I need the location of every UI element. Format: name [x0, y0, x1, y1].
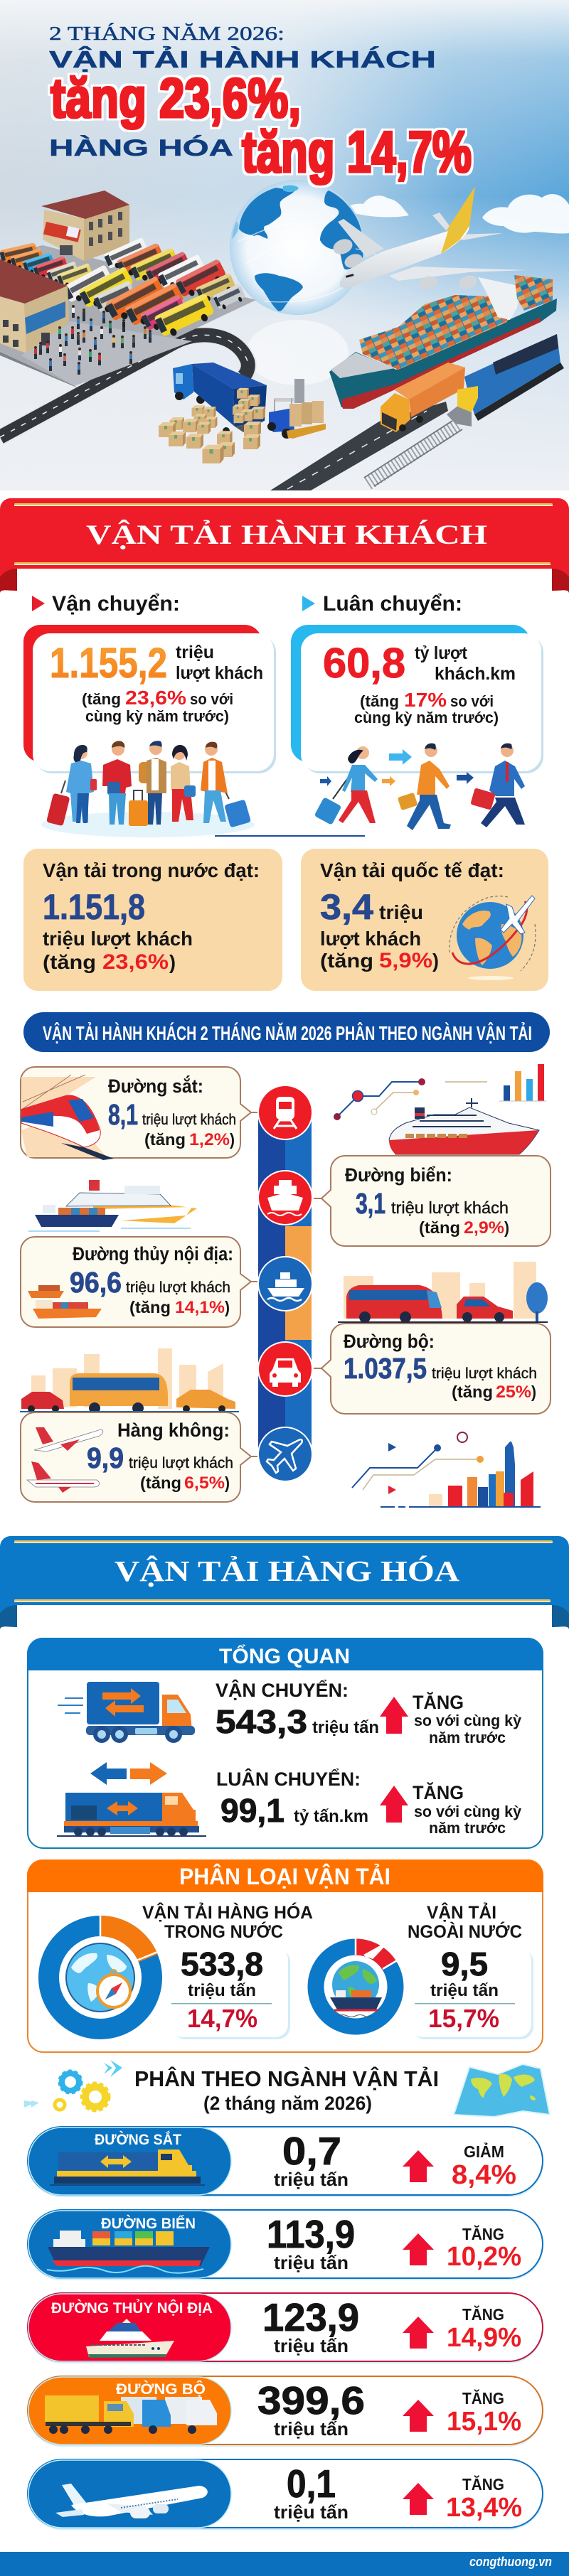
panel: overview: TĂNG [413, 1691, 464, 1713]
panel: overview: TĂNG [413, 1781, 464, 1803]
card: sea passenger: 3,1 [356, 1187, 385, 1220]
row: rail freight: GIẢM [464, 2141, 504, 2161]
panel: domestic transport: 23,6% [102, 950, 169, 974]
icon: clouds [345, 194, 569, 234]
row: road freight [27, 2376, 543, 2447]
row: road freight: 15,1% [447, 2407, 521, 2437]
icon: locomotive with arrows [57, 1762, 206, 1836]
panel: passenger volume card: (tăng [82, 690, 121, 708]
illustration: cruise and cargo ships left [28, 1180, 197, 1231]
row: sea freight: triệu tấn [274, 2252, 349, 2273]
card: domestic stats: 14,7% [187, 2004, 257, 2033]
hero title: tăng 23,6%, [50, 66, 301, 129]
panel: classification: TRONG NƯỚC [164, 1921, 283, 1942]
panel: passenger volume card: cùng kỳ năm trước) [85, 707, 229, 725]
icon: world map [454, 2064, 550, 2117]
panel: passenger-km card: tỷ lượt [415, 643, 468, 663]
card: air passenger: triệu lượt khách [129, 1455, 233, 1471]
panel: passenger section banner: VẬN TẢI HÀNH KHÁCH [86, 519, 487, 550]
row: sea freight: 113,9 [267, 2212, 355, 2256]
train: blue locomotive [447, 334, 564, 426]
card: rail passenger: 1,2% [189, 1130, 230, 1149]
card: road passenger: (tăng [452, 1383, 493, 1401]
footer: congthuong.vn [469, 2555, 552, 2569]
heading: by transport mode: PHÂN THEO NGÀNH VẬN TẢI [134, 2066, 439, 2091]
card: rail passenger [21, 1067, 257, 1160]
card: road passenger: 25% [496, 1383, 531, 1402]
panel: overview: 543,3 [216, 1703, 307, 1740]
panel: cargo section banner: VẬN TẢI HÀNG HÓA [115, 1555, 459, 1587]
icon: three trucks [45, 2395, 217, 2434]
heading: van chuyen: Vận chuyển: [52, 592, 180, 616]
panel: hero header [0, 0, 569, 490]
panel: overview: so với cùng kỳ [414, 1803, 522, 1820]
truck: orange [381, 363, 465, 432]
panel: passenger-km card: cùng kỳ năm trước) [354, 709, 499, 726]
illustration: group of travellers [41, 741, 255, 837]
panel: international transport: Vận tải quốc tế đạt: [320, 859, 504, 881]
card: inland waterway passenger: ) [225, 1298, 230, 1316]
row: rail freight: ĐƯỜNG SẮT [95, 2131, 181, 2148]
panel: classification [27, 1859, 543, 2052]
icon: airplane [55, 2484, 208, 2518]
row: inland waterway freight: 123,9 [262, 2295, 359, 2339]
card: sea passenger [314, 1156, 551, 1246]
hero title: VẬN TẢI HÀNH KHÁCH [49, 46, 436, 73]
panel: overview: năm trước [429, 1819, 506, 1837]
panel: domestic transport: Vận tải trong nước đạt: [43, 859, 260, 881]
card: rail passenger: triệu lượt khách [142, 1112, 236, 1128]
row: inland waterway freight [27, 2293, 543, 2363]
card: international stats: triệu tấn [430, 1981, 499, 2000]
row: air freight: triệu tấn [274, 2501, 349, 2523]
building: bus station front [0, 259, 69, 353]
icon: air circle [257, 1427, 313, 1482]
panel: overview [27, 1638, 543, 1848]
illustration: high speed train [21, 1075, 114, 1160]
panel: passenger-km card: so với [450, 692, 494, 710]
panel: domestic transport: ) [169, 951, 176, 973]
row: road freight: 399,6 [257, 2378, 365, 2422]
panel: passenger volume card: 23,6% [125, 687, 186, 709]
illustration: walking travellers with arrows [314, 744, 525, 830]
card: inland waterway passenger: (tăng [129, 1298, 171, 1316]
hero title: tăng 14,7% [242, 119, 472, 185]
panel: overview: triệu tấn [312, 1718, 379, 1737]
panel: overview: so với cùng kỳ [414, 1712, 522, 1729]
card: inland waterway passenger: triệu lượt khách [126, 1279, 230, 1296]
card: air passenger: 9,9 [87, 1442, 124, 1474]
panel: domestic transport: triệu lượt khách [43, 928, 193, 950]
row: rail freight: 0,7 [282, 2129, 341, 2173]
card: inland waterway passenger: Đường thủy nội địa: [73, 1243, 233, 1265]
panel: overview: TỔNG QUAN [219, 1644, 350, 1668]
card: inland waterway passenger [21, 1237, 257, 1327]
road and rail right [270, 402, 462, 490]
panel: overview: tỷ tấn.km [294, 1807, 368, 1826]
row: air freight [27, 2459, 543, 2530]
heading: by transport mode: (2 tháng năm 2026) [203, 2093, 372, 2114]
card: air passenger: ) [225, 1474, 230, 1492]
icon: globe with plane [450, 896, 536, 980]
row: sea freight: TĂNG [462, 2224, 504, 2243]
icon: yellow locomotive [50, 2150, 205, 2185]
panel: classification: NGOÀI NƯỚC [408, 1921, 522, 1942]
panel: passenger volume card: lượt khách [176, 663, 263, 683]
row: sea freight: ĐƯỜNG BIỂN [101, 2215, 196, 2232]
card: domestic stats: 533,8 [181, 1946, 263, 1982]
icon: small boats [28, 1285, 102, 1319]
card: international stats: 9,5 [441, 1946, 488, 1982]
panel: passenger volume card: 1.155,2 [50, 640, 167, 687]
card: domestic stats: triệu tấn [188, 1981, 256, 2000]
buses: parking [0, 237, 247, 340]
building: bus station back [41, 190, 129, 261]
panel: passenger volume card: triệu [176, 643, 214, 662]
parking ground [0, 245, 256, 386]
row: air freight: TĂNG [462, 2474, 504, 2494]
center timeline column [257, 1085, 313, 1482]
icon: rail circle [257, 1085, 313, 1140]
boxes [159, 388, 265, 463]
card: international stats: 15,7% [428, 2004, 499, 2033]
panel: classification: VẬN TẢI [427, 1901, 496, 1923]
panel: passenger-km card: (tăng [360, 692, 399, 710]
card: road passenger: triệu lượt khách [432, 1365, 537, 1382]
row: inland waterway freight: triệu tấn [274, 2335, 349, 2356]
forklift [267, 379, 326, 439]
arrow: up [403, 2150, 434, 2182]
hero title: 2 THÁNG NĂM 2026: [49, 23, 284, 44]
row: inland waterway freight: TĂNG [462, 2304, 504, 2324]
panel: passenger-km card: 17% [404, 689, 447, 711]
panel: passenger volume card [23, 625, 276, 773]
icon: globe [230, 180, 391, 385]
card: air passenger: Hàng không: [117, 1420, 230, 1441]
title bar: passenger by mode [23, 1012, 550, 1052]
ship: container vessel [329, 275, 557, 409]
illustration: cruise ship right [389, 1098, 539, 1154]
card: road passenger: ) [531, 1383, 536, 1401]
icon: road circle [257, 1341, 313, 1397]
card: rail passenger: Đường sắt: [108, 1075, 203, 1097]
panel: passenger-km card: 60,8 [323, 640, 405, 687]
heading: luan chuyen: Luân chuyển: [323, 592, 462, 616]
card: sea passenger: 2,9% [464, 1218, 504, 1238]
card: inland waterway passenger: 14,1% [175, 1298, 225, 1317]
card: road passenger [314, 1324, 551, 1414]
chart: domestic donut [48, 1915, 159, 2029]
illustration: red bus and van [338, 1262, 548, 1323]
row: rail freight: 8,4% [452, 2160, 516, 2190]
panel: overview: 99,1 [220, 1792, 284, 1829]
card: rail passenger: 8,1 [108, 1098, 138, 1131]
arrow: up [403, 2400, 434, 2432]
icon: planes [27, 1427, 103, 1493]
card: domestic stats [171, 1946, 290, 2039]
panel: classification: PHÂN LOẠI VẬN TẢI [179, 1864, 390, 1889]
row: rail freight: triệu tấn [274, 2169, 349, 2190]
row: road freight: ĐƯỜNG BỘ [116, 2381, 206, 2398]
panel: domestic transport: (tăng [43, 951, 96, 973]
arrow: up [380, 1697, 408, 1734]
hero title: HÀNG HÓA [49, 135, 233, 161]
icon: cargo ship [47, 2231, 210, 2273]
panel: passenger-km card [291, 625, 543, 773]
panel: overview: VẬN CHUYỂN: [216, 1679, 349, 1701]
icon: delivery truck [58, 1682, 195, 1743]
panel: international transport: triệu [379, 901, 423, 923]
arrow: up [403, 2317, 434, 2349]
panel: passenger volume card: so với [190, 690, 233, 708]
panel: passenger section banner [0, 498, 569, 594]
panel: international transport: 5,9% [379, 949, 432, 972]
panel: passenger-km card: khách.km [435, 664, 516, 684]
card: sea passenger: Đường biển: [345, 1164, 452, 1186]
row: inland waterway freight: 14,9% [447, 2323, 521, 2353]
card: air passenger: (tăng [140, 1474, 181, 1492]
plane: airliner [331, 186, 526, 292]
row: sea freight: 10,2% [447, 2242, 521, 2272]
row: inland waterway freight: ĐƯỜNG THỦY NỘI ĐỊA [51, 2299, 213, 2317]
panel: international transport: lượt khách [320, 928, 421, 950]
decoration: gears and chevron [24, 2060, 122, 2111]
panel: domestic transport [23, 849, 282, 991]
panel: cargo section banner [0, 1536, 569, 1630]
panel: overview: năm trước [429, 1729, 506, 1746]
icon: waterway circle [257, 1256, 313, 1311]
truck: blue container [173, 363, 267, 434]
arrow: up [403, 2233, 434, 2265]
heading: by transport mode [134, 2066, 439, 2114]
panel: international transport: ) [432, 950, 439, 972]
card: sea passenger: triệu lượt khách [391, 1198, 509, 1217]
card: road passenger: Đường bộ: [344, 1331, 435, 1352]
row: road freight: triệu tấn [274, 2418, 349, 2440]
arrow: up [403, 2483, 434, 2515]
row: rail freight [27, 2127, 543, 2197]
decoration: city bars bottom right [352, 1432, 541, 1507]
panel: domestic transport: 1.151,8 [43, 887, 145, 927]
card: rail passenger: (tăng [144, 1130, 186, 1149]
hero title [49, 23, 472, 185]
card: road passenger: 1.037,5 [344, 1352, 427, 1385]
row: air freight: 0,1 [287, 2462, 336, 2506]
card: inland waterway passenger: 96,6 [70, 1266, 122, 1299]
row: air freight: 13,4% [446, 2493, 522, 2523]
icon: passenger ferry [86, 2319, 174, 2358]
road curve [0, 335, 248, 437]
row: road freight: TĂNG [462, 2388, 504, 2408]
arrow: up [380, 1786, 408, 1823]
people crowd [34, 305, 151, 375]
icon: sea circle [257, 1170, 313, 1225]
card: rail passenger: ) [230, 1130, 235, 1149]
panel: international transport: 3,4 [320, 887, 373, 927]
card: sea passenger: ) [504, 1218, 509, 1237]
panel: international transport [301, 849, 548, 991]
row: sea freight [27, 2210, 543, 2280]
panel: overview: LUÂN CHUYỂN: [216, 1768, 361, 1790]
card: sea passenger: (tăng [419, 1218, 460, 1237]
panel: international transport: (tăng [320, 950, 373, 972]
card: international stats [410, 1946, 533, 2039]
chart: international donut [316, 1938, 398, 2027]
illustration: city bus and cars [20, 1348, 239, 1414]
card: air passenger: 6,5% [184, 1474, 225, 1493]
card: air passenger [21, 1412, 257, 1502]
footer [0, 2552, 569, 2576]
decoration: network nodes and bars top right [334, 1064, 546, 1120]
panel: classification: VẬN TẢI HÀNG HÓA [142, 1901, 313, 1923]
